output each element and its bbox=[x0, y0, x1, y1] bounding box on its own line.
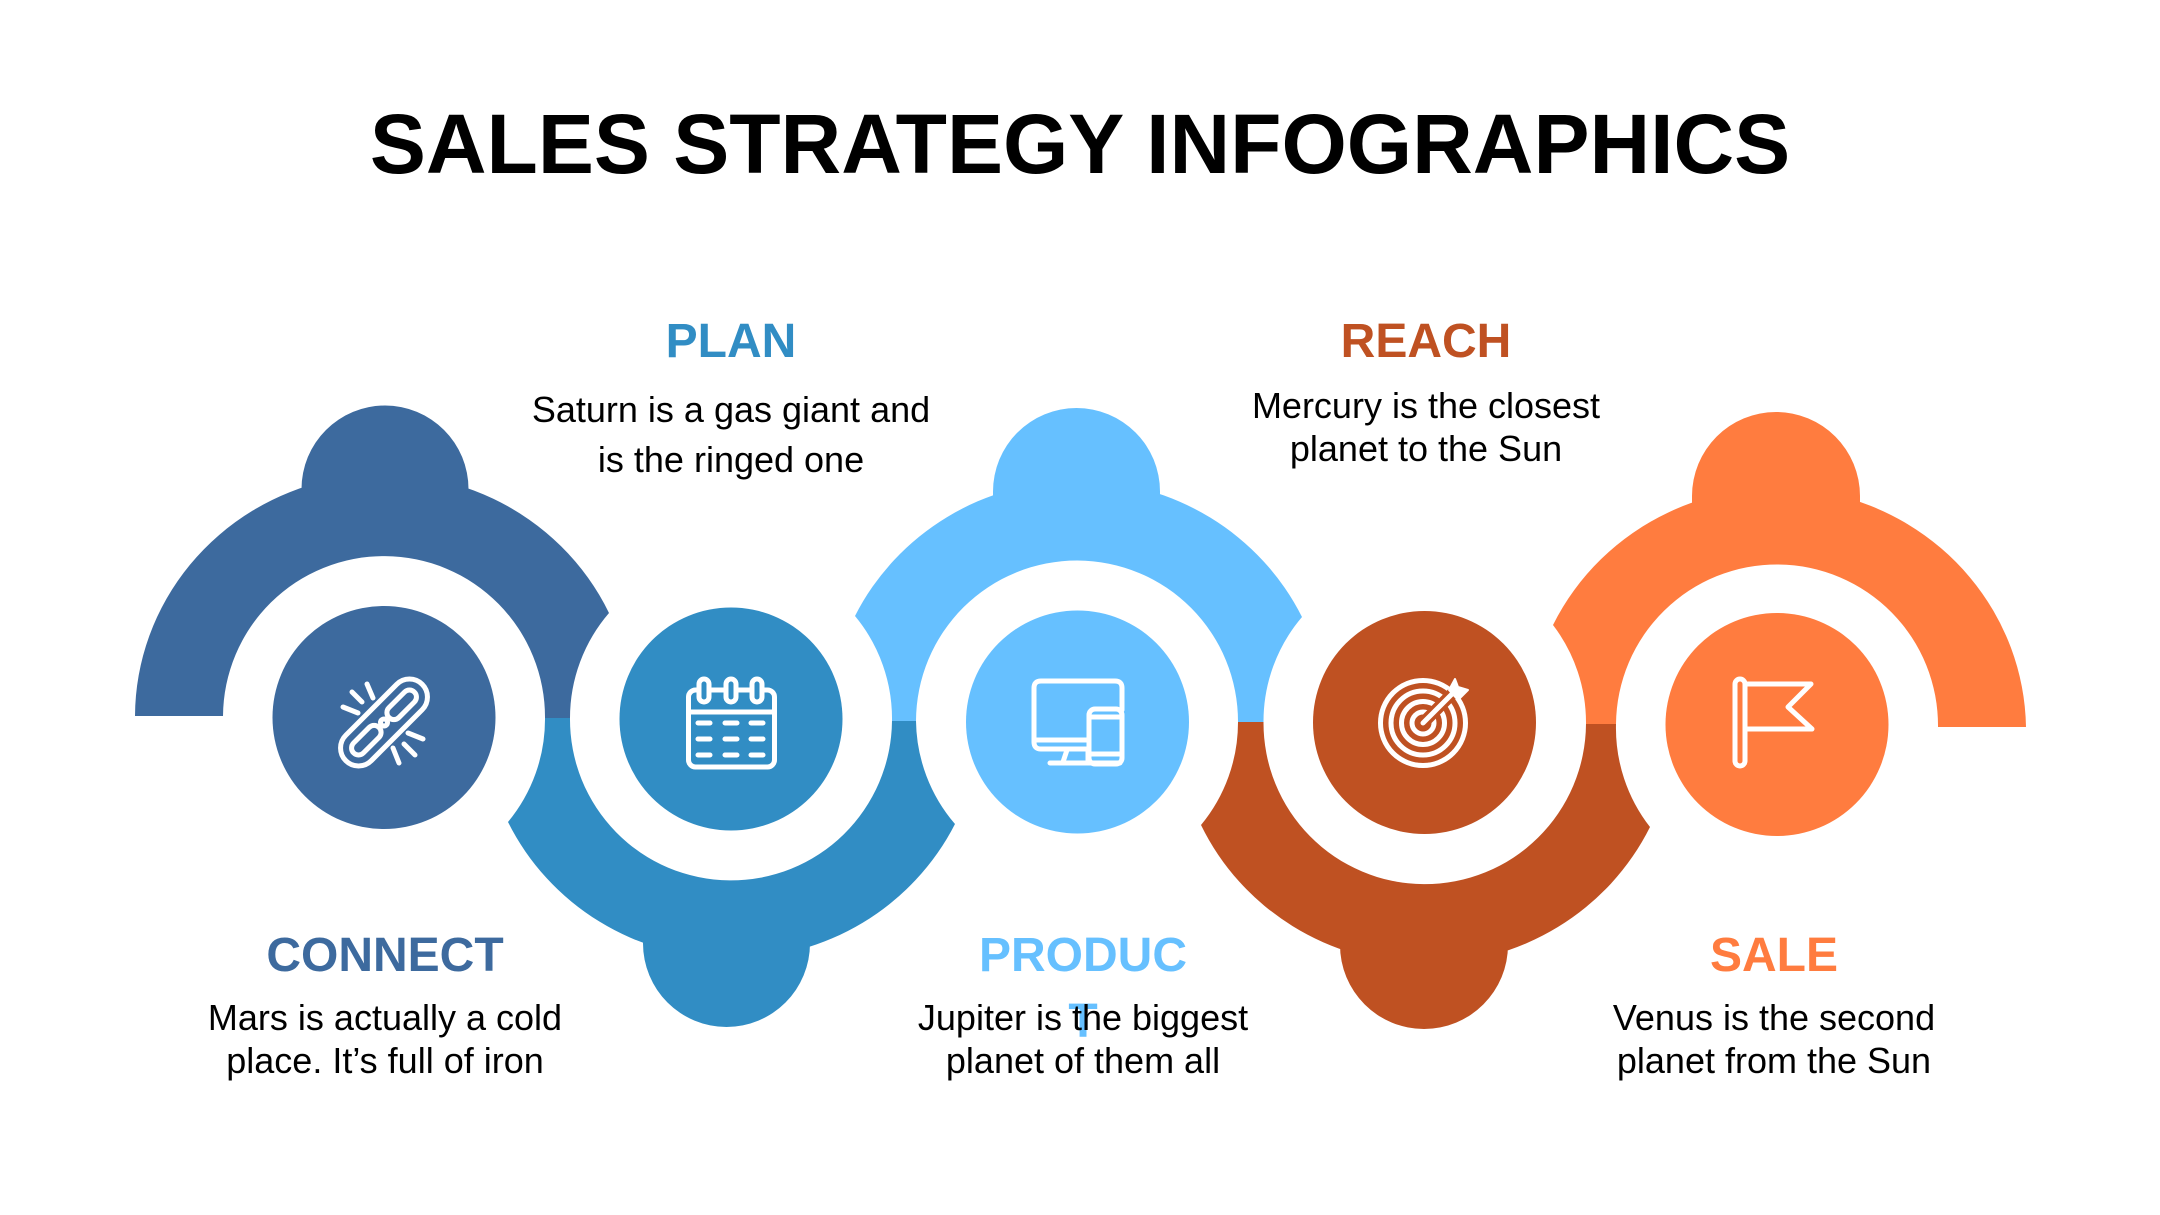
description: sale: Venus is the second bbox=[1613, 997, 1935, 1038]
arc: reach bbox=[1201, 722, 1650, 1029]
arc: connect bbox=[135, 406, 609, 718]
description: reach: Mercury is the closest bbox=[1252, 385, 1600, 426]
arc: sale bbox=[1553, 412, 2026, 727]
description: plan: is the ringed one bbox=[598, 439, 864, 480]
panel: connect bbox=[135, 406, 609, 1081]
description: plan: Saturn is a gas giant and bbox=[532, 389, 930, 430]
description: plan bbox=[532, 389, 930, 480]
icon: monitor and phone bbox=[1034, 681, 1122, 764]
arc: plan bbox=[508, 718, 955, 1027]
panel: reach bbox=[1201, 315, 1650, 1029]
circle: sale bbox=[1666, 613, 1888, 836]
description: connect: place. It’s full of iron bbox=[226, 1040, 544, 1081]
description: sale: planet from the Sun bbox=[1617, 1040, 1931, 1081]
circle: plan bbox=[620, 608, 842, 830]
heading: product: PRODUC bbox=[979, 929, 1187, 982]
circle: connect bbox=[272, 606, 496, 829]
circle: product bbox=[966, 610, 1189, 834]
panel: sale bbox=[1553, 412, 2026, 1081]
icon: target with arrow bbox=[1380, 679, 1468, 766]
heading: product bbox=[979, 929, 1187, 1048]
description: product: planet of them all bbox=[946, 1040, 1220, 1081]
description: product: Jupiter is the biggest bbox=[918, 997, 1248, 1038]
title: SALES STRATEGY INFOGRAPHICS bbox=[370, 97, 1790, 191]
description: connect bbox=[208, 997, 562, 1081]
description: reach: planet to the Sun bbox=[1290, 428, 1562, 469]
circle: reach bbox=[1313, 611, 1536, 834]
description: reach bbox=[1252, 385, 1600, 469]
description: product bbox=[918, 997, 1248, 1081]
heading: sale: SALE bbox=[1710, 929, 1838, 982]
heading: connect: CONNECT bbox=[266, 929, 504, 982]
icon: calendar bbox=[688, 679, 774, 767]
panel: plan bbox=[508, 315, 955, 1027]
heading: plan: PLAN bbox=[666, 315, 796, 368]
arc: product bbox=[855, 408, 1302, 722]
heading: reach: REACH bbox=[1341, 315, 1511, 368]
description: connect: Mars is actually a cold bbox=[208, 997, 562, 1038]
icon: broken chain link bbox=[333, 672, 435, 773]
description: sale bbox=[1613, 997, 1935, 1081]
panel: product bbox=[855, 408, 1302, 1081]
icon: flag bbox=[1735, 679, 1812, 766]
heading: product: T bbox=[1068, 995, 1098, 1048]
